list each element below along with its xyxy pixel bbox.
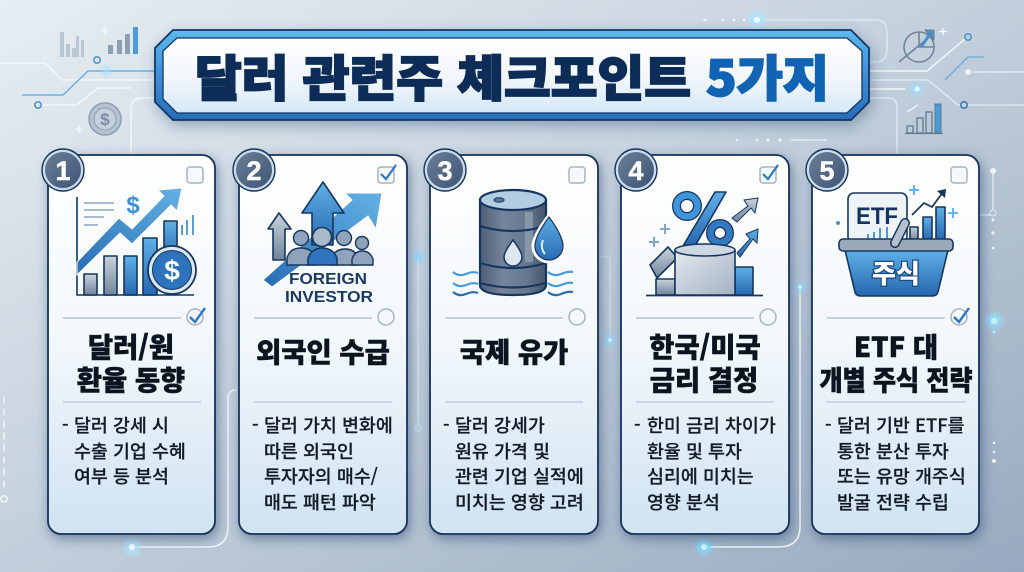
heading 4: 금리 결정 [650,358,758,398]
icon: foreign investor arrows and people [263,182,382,306]
card 5 background [812,155,979,534]
icon: pie chart with arrow [899,30,934,62]
badge 3: 3 [437,156,453,186]
check circle 5 [951,308,969,325]
icon: small bar chart top right [905,104,943,134]
badge 1 [42,149,84,191]
body text 2: - [252,412,259,438]
checkbox 5 [951,167,967,183]
icon: rising chart with dollar coin: $ [164,255,180,286]
body text 2: 매도 패턴 파악 [264,489,376,515]
body text 1: 달러 강세 시 [74,412,169,438]
badge 4 [615,149,657,191]
body text 3: - [443,412,450,438]
icon: faded bars [60,32,84,57]
checkbox 4 [760,165,778,183]
heading 5: 개별 주식 전략 [820,358,972,398]
inner divider 3 [445,401,583,403]
body text 5: 통한 분산 투자 [837,438,949,464]
badge 3 [424,149,466,191]
heading 5: ETF 대 [854,325,938,365]
panel: 4 한국/미국 금리 결정 [615,149,789,534]
icon: small bar chart top left [108,27,138,54]
icon: rising chart with dollar coin: $ [126,192,140,219]
body text 4: 심리에 미치는 [647,463,754,489]
body text 3 [443,412,584,515]
body text 4: 한미 금리 차이가 [647,412,776,438]
body text 1: 여부 등 분석 [74,463,169,489]
body text 3: 관련 기업 실적에 [455,463,584,489]
divider 3 [445,317,563,319]
icon: foreign investor arrows and people: FOREIGN [289,271,367,288]
heading 4 [649,325,761,398]
badge 5: 5 [819,156,835,186]
badge 5 [806,149,848,191]
body text 3: 원유 가격 및 [455,438,550,464]
body text 4: 환율 및 투자 [647,438,742,464]
panel: 1 달러/원 환율 동향 [42,149,215,534]
divider 1 [63,317,181,319]
check circle 4 [760,309,776,325]
icon: percent sign on cylinder [646,192,763,296]
panel: 5 ETF 대 개별 주식 전략 [806,149,979,534]
icon: oil barrel with drop [453,190,573,295]
body text 1: 수출 기업 수혜 [74,438,186,464]
check circle 1 [187,308,205,325]
heading 3: 국제 유가 [460,330,568,370]
icon: ETF basket: 주식 [872,254,920,291]
card 1 background [48,155,215,534]
circuit lines: top left [0,57,155,153]
heading 1: 달러/원 [88,325,174,365]
title: 달러 관련주 체크포인트 [195,40,691,111]
badge 4: 4 [628,156,644,186]
body text 5: 달러 기반 ETF를 [837,412,965,438]
heading 1 [77,325,185,398]
body text 4: - [634,412,641,438]
banner frame [155,30,869,120]
inner divider 4 [636,401,774,403]
divider 4 [636,317,754,319]
inner divider 2 [254,401,392,403]
check circle 3 [569,309,585,325]
badge 2 [233,149,275,191]
body text 1 [62,412,186,489]
check circle 2 [378,309,394,325]
heading 5 [820,325,972,398]
title banner [155,30,869,120]
divider 5 [827,317,945,319]
checkbox 3 [569,167,585,183]
body text 2 [252,412,393,515]
divider 2 [254,317,372,319]
body text 3: 달러 강세가 [455,412,545,438]
body text 1: - [62,412,69,438]
body text 5 [825,412,966,515]
checkbox 2 [378,165,396,183]
heading 1: 환율 동향 [77,358,185,398]
icon: plus marks [76,27,947,133]
badge 1: 1 [55,156,71,186]
icon: dollar coin [89,103,121,135]
badge 2: 2 [246,156,262,186]
body text 4: 영향 분석 [647,489,720,515]
inner divider 5 [826,401,966,403]
card 2 background [239,155,407,534]
body text 2: 달러 가치 변화에 [264,412,393,438]
icon: foreign investor arrows and people: INVESTOR [285,289,373,306]
body text 3: 미치는 영향 고려 [455,489,584,515]
icon: ETF basket: ETF [856,203,898,230]
body text 4 [634,412,776,515]
heading 2: 외국인 수급 [256,330,390,370]
circuit lines: top right [703,13,1024,153]
circuit lines: around cards [1,168,1001,554]
banner inner plate [163,38,862,113]
icon: dollar coin: $ [100,110,110,129]
body text 2: 따른 외국인 [264,438,354,464]
title: 5가지 [706,40,829,111]
heading 4: 한국/미국 [649,325,761,365]
body text 5: - [825,412,832,438]
body text 5: 또는 유망 개주식 [837,463,966,489]
body text 5: 발굴 전략 수립 [837,489,949,515]
body text 2: 투자자의 매수/ [264,463,378,489]
icon: rising chart with dollar coin [77,188,196,295]
panel: 3 국제 유가 [424,149,598,534]
card 3 background [430,155,598,534]
inner divider 1 [63,401,201,403]
checkbox 1 [187,167,203,183]
panel: 2 외국인 수급 [233,149,407,534]
card 4 background [621,155,789,534]
icon: ETF basket [836,185,958,296]
